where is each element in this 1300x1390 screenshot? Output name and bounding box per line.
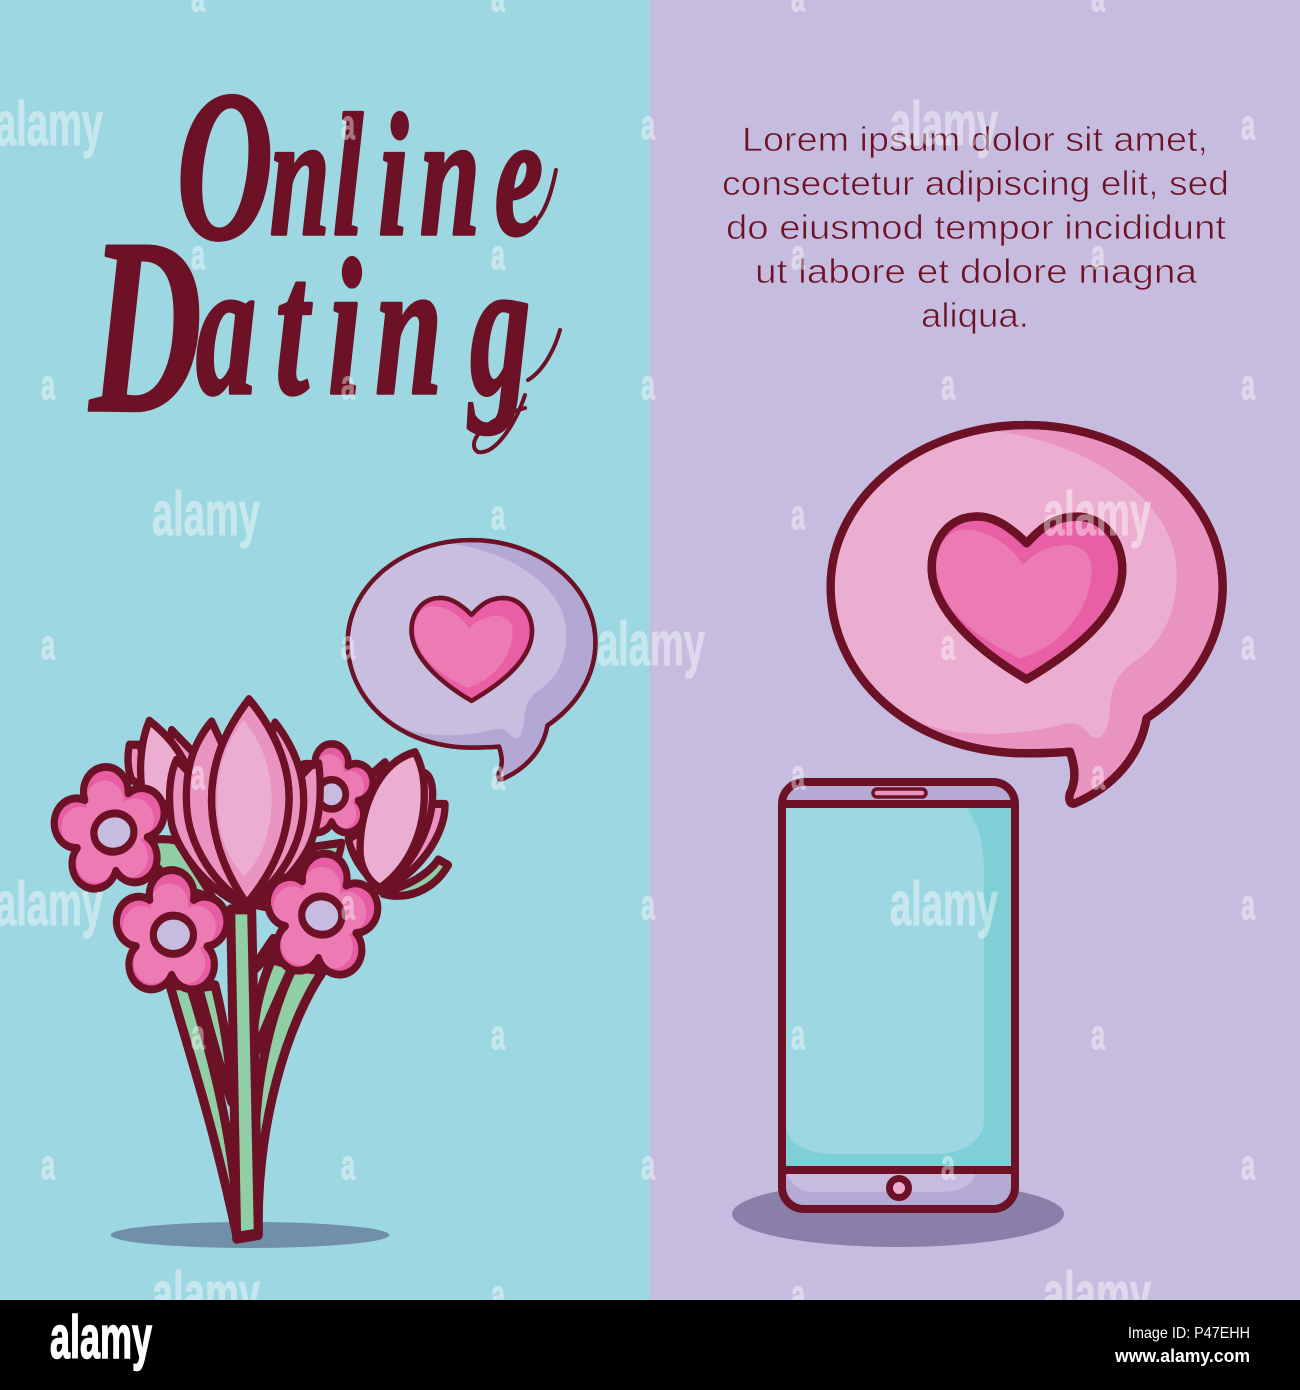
title: Online Dating [88, 47, 543, 464]
phone shadow [732, 1181, 1064, 1247]
watermarks: a [341, 361, 355, 408]
screen dividers [782, 804, 1015, 1170]
watermarks: alamy [1043, 480, 1151, 549]
watermarks: a [1091, 751, 1105, 798]
phone outline [782, 782, 1015, 1209]
site address: www.alamy.com [1114, 1346, 1250, 1366]
watermarks: alamy [890, 870, 998, 939]
watermarks: a [341, 1141, 355, 1188]
image id: Image ID: P47EHH [1128, 1325, 1250, 1342]
watermarks: a [491, 751, 505, 798]
watermarks: alamy [890, 90, 998, 159]
central tulip [170, 699, 320, 906]
text block: lorem ipsum paragraph: Lorem ipsum dolor sit amet, [742, 121, 1208, 159]
watermarks: a [791, 231, 805, 278]
watermarks: alamy [152, 480, 260, 549]
watermarks: a [41, 1141, 55, 1188]
watermarks: a [941, 621, 955, 668]
watermarks: a [191, 1011, 205, 1058]
watermarks: a [1241, 361, 1255, 408]
footer logo: alamy [50, 1304, 152, 1371]
watermarks: alamy [0, 870, 103, 939]
watermarks: a [341, 101, 355, 148]
watermarks: a [791, 491, 805, 538]
watermarks: a [41, 361, 55, 408]
watermarks: alamy [1043, 1260, 1151, 1329]
title: Online Dating: nline [270, 79, 543, 272]
watermarks: a [1241, 101, 1255, 148]
watermarks: a [41, 621, 55, 668]
back left tulip [128, 721, 197, 806]
icon: large pink speech bubble with heart [831, 425, 1223, 804]
flower front [116, 870, 227, 989]
bouquet ground shadow [111, 1222, 389, 1248]
watermarks: a [941, 1141, 955, 1188]
watermarks: alamy [597, 610, 705, 679]
text block: lorem ipsum paragraph: do eiusmod tempor incididunt [726, 209, 1227, 247]
title: Online Dating: O [177, 47, 273, 285]
footer bar [0, 1300, 1300, 1390]
watermarks: a [191, 751, 205, 798]
icon: small lilac speech bubble with heart [348, 540, 595, 779]
panel: left teal background [0, 0, 650, 1300]
flower left [48, 759, 172, 894]
watermarks: alamy [152, 1260, 260, 1329]
watermarks: a [1241, 621, 1255, 668]
stems [170, 909, 323, 1239]
watermarks: a [641, 361, 655, 408]
watermarks: a [1091, 231, 1105, 278]
watermarks: a [341, 621, 355, 668]
panel: right lilac background [650, 0, 1300, 1300]
watermarks: a [1241, 881, 1255, 928]
home button [890, 1178, 908, 1198]
watermarks: a [191, 231, 205, 278]
watermarks: a [641, 101, 655, 148]
watermarks: a [941, 361, 955, 408]
screen [785, 804, 1013, 1168]
watermarks: a [491, 1271, 505, 1318]
watermarks: a [491, 491, 505, 538]
watermarks: a [791, 1011, 805, 1058]
text block: lorem ipsum paragraph: consectetur adipiscing elit, sed [722, 165, 1229, 203]
text block: lorem ipsum paragraph [722, 121, 1229, 335]
watermarks: a [641, 1141, 655, 1188]
watermarks: a [1091, 1011, 1105, 1058]
watermarks: a [791, 751, 805, 798]
bottom bar highlight [787, 1172, 975, 1192]
title flourishes [474, 170, 560, 452]
stem base [237, 1231, 259, 1240]
watermarks: alamy [0, 90, 103, 159]
title: Online Dating: D [88, 188, 202, 464]
back right tulip [348, 752, 448, 896]
watermarks: a [641, 881, 655, 928]
phone body [782, 782, 1015, 1209]
watermarks: a [341, 881, 355, 928]
watermarks: a [791, 1271, 805, 1318]
screen highlight [785, 805, 984, 1154]
text block: lorem ipsum paragraph: aliqua. [921, 297, 1029, 335]
flower behind tulip [291, 744, 373, 833]
flower right front [262, 848, 382, 978]
left leaf [143, 839, 213, 898]
right leaf of centre tulip [258, 843, 342, 908]
watermarks: a [491, 1011, 505, 1058]
text block: lorem ipsum paragraph: ut labore et dolore magna [755, 253, 1197, 291]
icon: flower bouquet [48, 699, 448, 1248]
watermarks: a [491, 231, 505, 278]
watermarks: a [1241, 1141, 1255, 1188]
icon: smartphone [782, 782, 1015, 1209]
title: Online Dating: ating [196, 220, 530, 436]
speaker [873, 789, 926, 797]
